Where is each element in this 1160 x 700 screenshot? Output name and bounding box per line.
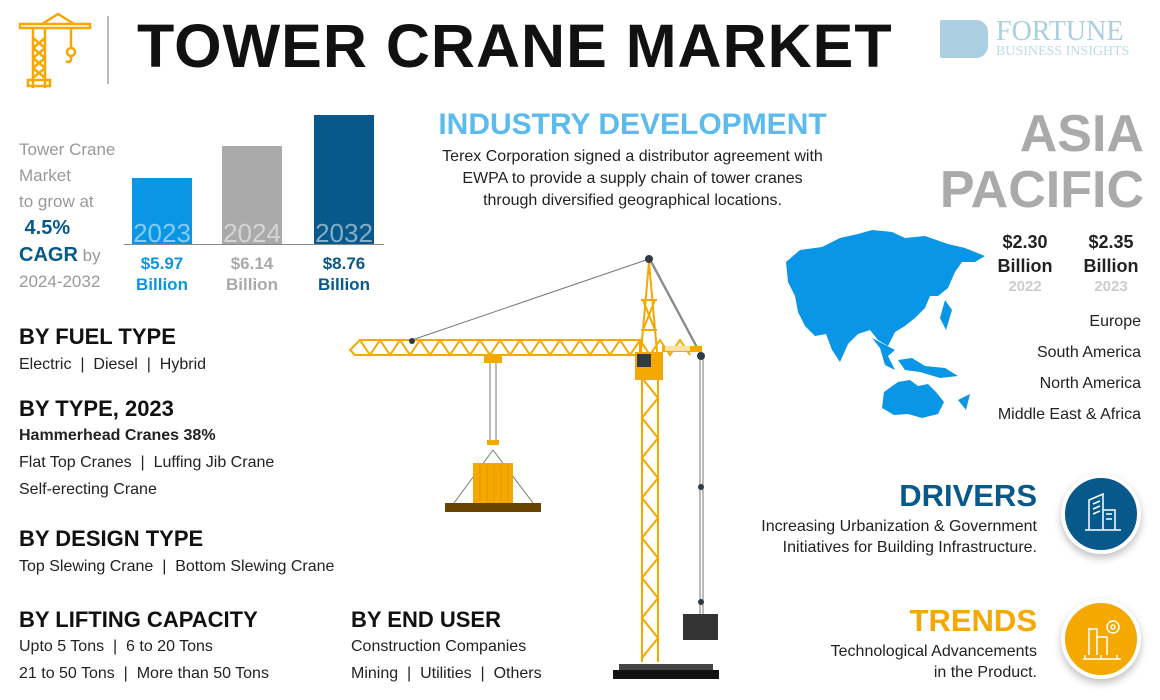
text: growth summary: Tower Crane [19,140,115,159]
drivers [761,478,1037,556]
bar chart: $6.14 [231,254,273,273]
stats: asia pacific values: 2022 [1008,278,1042,295]
segment: end user [351,607,542,682]
industry development: through diversified geographical locations. [483,192,782,209]
list: other regions: North America [1040,375,1141,392]
bar chart: $8.76 [323,254,365,273]
text: growth summary: Market [19,166,71,185]
stats: asia pacific values: $2.30 [1002,232,1048,252]
map: asia pacific [786,230,985,418]
icon: drivers building [1061,474,1141,554]
segment: fuel type: Electric | Diesel | Hybrid [19,356,206,373]
bar chart: 2024 [223,218,281,248]
segment: end user: BY END USER [351,607,501,632]
bar chart: $5.97 [141,254,183,273]
region title: asia pacific: ASIA [1020,105,1144,163]
title: TOWER CRANE MARKET [137,12,893,80]
list: other regions: Europe [1089,313,1141,330]
logo: fortune business insights: FORTUNE [996,16,1123,47]
bar chart: 2023 [133,218,191,248]
list: other regions: South America [1037,344,1141,361]
drivers: DRIVERS [899,478,1037,513]
segment: lifting capacity [19,607,269,682]
drivers: Initiatives for Building Infrastructure. [783,539,1037,556]
bar chart: Billion [226,275,278,294]
segment: type: Hammerhead Cranes 38% [19,427,216,444]
drivers: Increasing Urbanization & Government [761,518,1037,535]
segment: type [19,396,274,498]
segment: lifting capacity: 21 to 50 Tons | More than 50 Tons [19,665,269,682]
bar chart [124,115,384,294]
segment: design type: Top Slewing Crane | Bottom Slewing Crane [19,558,334,575]
segment: type: BY TYPE, 2023 [19,396,174,421]
bar chart: Billion [136,275,188,294]
icon: trends gear building [1061,599,1141,679]
stats: asia pacific values: Billion [1084,256,1138,276]
stats: asia pacific values: Billion [998,256,1052,276]
segment: lifting capacity: Upto 5 Tons | 6 to 20 Tons [19,638,213,655]
logo: fortune business insights [940,16,1129,59]
trends: TRENDS [910,603,1037,638]
bar chart: 2032 [315,218,373,248]
region title: asia pacific [940,105,1144,219]
logo: fortune business insights: BUSINESS INSIGHTS [996,44,1129,59]
industry development: EWPA to provide a supply chain of tower cranes [462,170,803,187]
icon: crane logo [18,12,92,88]
segment: lifting capacity: BY LIFTING CAPACITY [19,607,258,632]
segment: fuel type: BY FUEL TYPE [19,324,176,349]
trends: in the Product. [934,664,1037,681]
text: growth summary: 4.5% [25,217,70,239]
industry development: Terex Corporation signed a distributor agreement with [442,148,823,165]
text: growth summary [19,140,115,291]
segment: design type: BY DESIGN TYPE [19,526,203,551]
segment: end user: Construction Companies [351,638,526,655]
stats: asia pacific values [998,232,1138,295]
bar chart: Billion [318,275,370,294]
trends: Technological Advancements [831,643,1037,660]
text: growth summary: CAGR by [19,244,101,266]
industry development [438,108,827,209]
region title: asia pacific: PACIFIC [940,161,1144,219]
text: growth summary: to grow at [19,192,94,211]
segment: fuel type [19,324,206,373]
illustration: tower crane [348,255,719,679]
stats: asia pacific values: $2.35 [1088,232,1134,252]
list: other regions [998,313,1142,423]
segment: type: Flat Top Cranes | Luffing Jib Crane [19,454,274,471]
segment: end user: Mining | Utilities | Others [351,665,542,682]
text: growth summary: 2024-2032 [19,272,100,291]
segment: design type [19,526,334,575]
trends [831,603,1037,681]
stats: asia pacific values: 2023 [1094,278,1128,295]
industry development: INDUSTRY DEVELOPMENT [438,108,827,141]
list: other regions: Middle East & Africa [998,406,1141,423]
segment: type: Self-erecting Crane [19,481,157,498]
